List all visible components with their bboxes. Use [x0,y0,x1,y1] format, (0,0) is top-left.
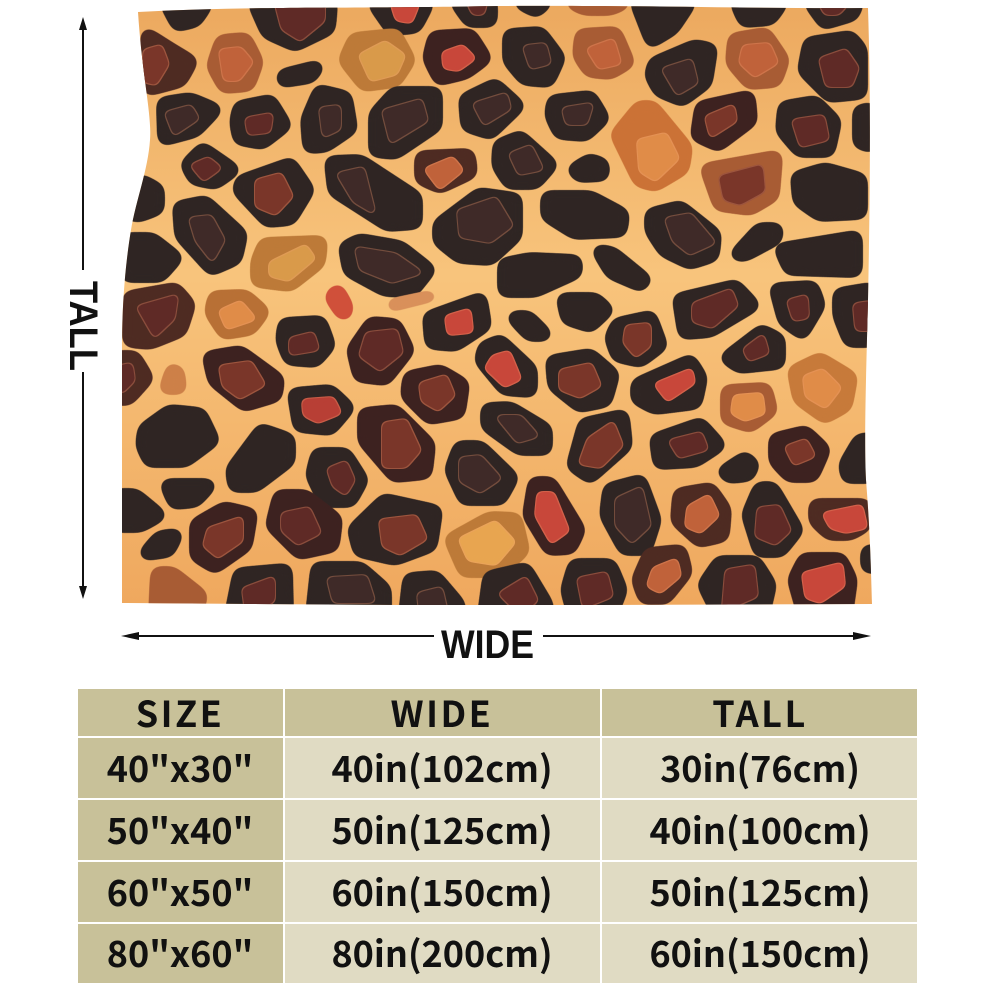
row 40x30: 40"x30" [107,741,253,793]
size table [78,686,917,983]
arrow: wide dimension, left [121,632,434,640]
row 60x50: 50in(125cm) [649,865,871,917]
table header row: TALL [712,686,808,738]
label: WIDE: WIDE [441,623,534,667]
row 60x50: 60in(150cm) [331,865,553,917]
row 40x30 [78,738,917,798]
row 50x40: 40in(100cm) [649,803,871,855]
row 80x60: 60in(150cm) [649,926,871,978]
row 80x60: 80"x60" [107,926,253,978]
blanket with spotted pattern [118,3,880,615]
label: TALL: TALL [61,281,105,371]
table header row: WIDE [391,686,493,738]
arrow: tall dimension, lower [79,372,87,599]
row 40x30: 30in(76cm) [660,741,860,793]
row 60x50 [78,862,917,922]
table header row: SIZE [136,686,224,738]
arrow: tall dimension, upper [79,17,87,270]
row 80x60 [78,924,917,983]
row 50x40: 50"x40" [107,803,253,855]
row 80x60: 80in(200cm) [331,926,553,978]
table header row [78,686,917,738]
row 50x40: 50in(125cm) [331,803,553,855]
row 50x40 [78,800,917,860]
arrow: wide dimension, right [543,632,871,640]
row 60x50: 60"x50" [107,865,253,917]
row 40x30: 40in(102cm) [331,741,553,793]
